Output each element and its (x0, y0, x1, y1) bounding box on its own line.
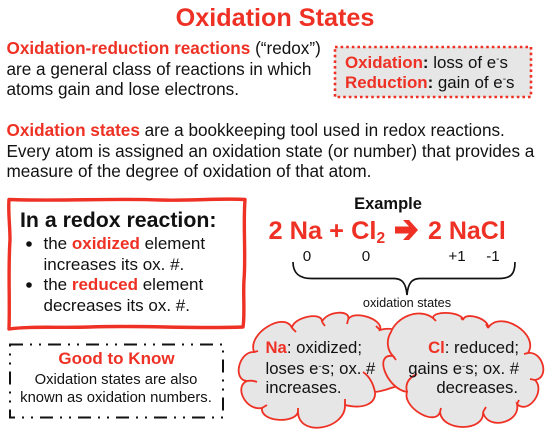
panel: good to know: Good to Know (58, 349, 175, 368)
brace (293, 262, 515, 295)
cloud: chlorine: s; ox. # (465, 359, 520, 378)
panel: in a redox reaction (9, 199, 245, 329)
text block: oxidation states definition: measure of the degree of oxidation of that atom. (6, 161, 371, 181)
cloud: sodium: loses e (266, 359, 318, 378)
chemical equation: 2 (376, 230, 385, 247)
oxidation state numbers: 0 (362, 248, 370, 265)
text block: oxidation states definition: Oxidation states are a bookkeeping tool used in redox reactions. (6, 120, 505, 140)
panel: good to know (10, 344, 223, 418)
panel: oxidation and reduction definitions: Oxidation: loss of e (345, 53, 496, 72)
heading: example: Example (354, 195, 422, 213)
oxidation state numbers: 0 (303, 248, 311, 265)
title: Oxidation States (176, 4, 374, 32)
panel: oxidation and reduction definitions: - (496, 54, 499, 65)
panel: oxidation and reduction definitions: Reduction: gain of e (345, 73, 503, 92)
text block: redox definition: are a general class of reactions in which (6, 59, 311, 79)
cloud text: sodium: Na: oxidized; (266, 338, 362, 357)
text block: oxidation states definition (6, 120, 535, 181)
cloud: chlorine: decreases. (436, 378, 518, 397)
arrow: reaction (395, 220, 418, 240)
bullet list: the oxidized element (44, 234, 205, 253)
cloud text: chlorine: Cl: reduced; (428, 338, 519, 357)
text block: redox definition (6, 38, 321, 99)
text block: redox definition: atoms gain and lose electrons. (6, 79, 239, 99)
oxidation state numbers: +1 (448, 248, 466, 265)
bullet list: decreases its ox. #. (44, 296, 190, 315)
chemical equation: 2 Na + Cl (268, 217, 376, 245)
panel: oxidation and reduction definitions: s (506, 73, 514, 92)
cloud: sodium: increases. (266, 378, 342, 397)
heading: in a redox reaction: In a redox reaction: (20, 208, 216, 232)
oxidation state numbers (303, 248, 500, 265)
cloud: sodium: - (318, 361, 322, 372)
chemical equation: 2 NaCl (428, 217, 506, 245)
panel: oxidation and reduction definitions: s (499, 53, 508, 72)
text block: redox definition: Oxidation-reduction reactions (“redox”) (6, 38, 321, 58)
cloud: chlorine (383, 313, 543, 427)
panel: good to know: Oxidation states are also (35, 372, 197, 388)
text block: oxidation states definition: Every atom is assigned an oxidation state (or number) that provides a (6, 141, 535, 161)
panel: good to know: known as oxidation numbers. (20, 390, 212, 406)
bullet list: the reduced element (44, 275, 203, 294)
cloud: chlorine: - (462, 361, 465, 372)
cloud: sodium: s; ox. # (322, 359, 376, 378)
cloud: sodium (239, 313, 420, 428)
cloud: chlorine: gains e (408, 359, 462, 378)
label: oxidation states: oxidation states (363, 296, 451, 310)
chemical equation (268, 217, 506, 247)
bullet list (26, 234, 205, 315)
bullet list: increases its ox. #. (44, 255, 184, 274)
panel: oxidation and reduction definitions: - (503, 74, 506, 85)
panel: oxidation and reduction definitions (335, 47, 531, 97)
oxidation state numbers: -1 (486, 248, 500, 265)
